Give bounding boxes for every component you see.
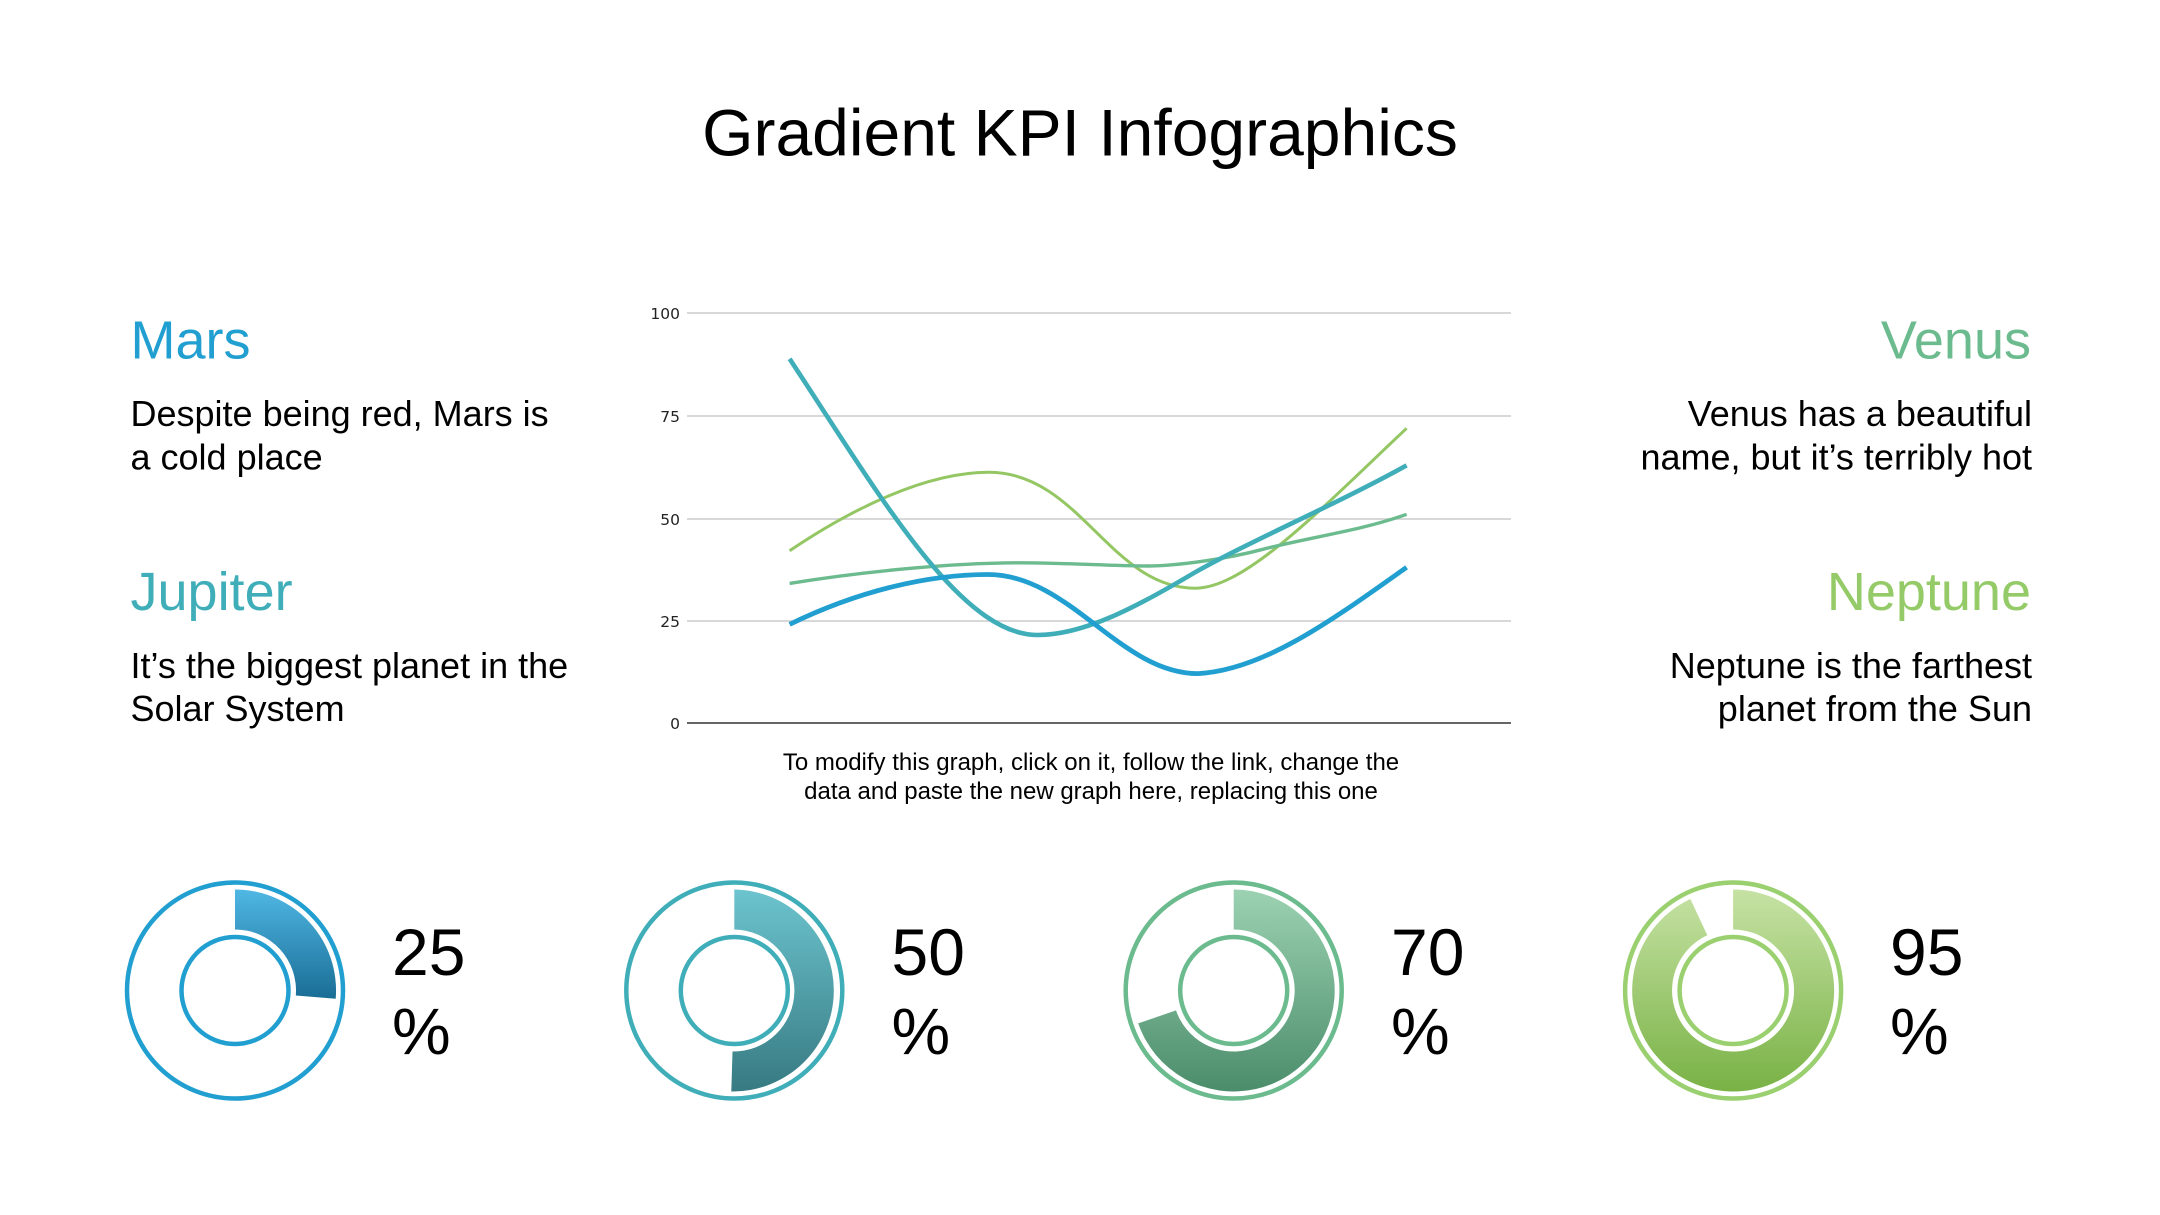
donut: 50% — [626, 882, 842, 1098]
text: Jupiter description: It’s the biggest planet in the — [130, 645, 568, 686]
text: Venus description: Venus has a beautiful — [1688, 393, 2032, 434]
heading: Jupiter: Jupiter — [130, 562, 293, 622]
text: Neptune description: planet from the Sun — [1718, 688, 2032, 729]
value: 25%: % — [392, 994, 451, 1068]
heading: Neptune: Neptune — [1827, 562, 2031, 622]
donut: 25% — [127, 882, 343, 1098]
text: Venus description: name, but it’s terribly hot — [1640, 436, 2032, 478]
axis labels: 50 — [660, 511, 680, 529]
text: Mars description: Despite being red, Mars is — [130, 393, 549, 434]
value: 50%: % — [892, 994, 950, 1068]
line: Jupiter series — [790, 359, 1407, 635]
line: Venus series — [790, 514, 1407, 583]
text: Jupiter description: Solar System — [130, 688, 345, 729]
value: 95%: % — [1890, 994, 1949, 1068]
value: 50%: 50 — [892, 915, 965, 989]
chart caption: data and paste the new graph here, replacing this one — [804, 778, 1378, 805]
line chart — [650, 305, 1511, 733]
value: 70%: 70 — [1391, 915, 1464, 989]
axis labels: 0 — [670, 715, 680, 733]
donut: 95% — [1625, 882, 1841, 1098]
axis labels: 75 — [660, 408, 680, 426]
heading: Venus: Venus — [1881, 310, 2031, 370]
line: Neptune series — [790, 428, 1407, 588]
value: 25%: 25 — [392, 915, 465, 989]
panel: Neptune — [1670, 562, 2032, 729]
heading: Mars: Mars — [130, 310, 250, 370]
text: Mars description: a cold place — [130, 436, 323, 478]
axis labels: 25 — [660, 613, 680, 631]
value: 70%: % — [1391, 994, 1450, 1068]
panel: Mars — [130, 310, 549, 478]
panel: Venus — [1640, 310, 2032, 478]
value: 95%: 95 — [1890, 915, 1963, 989]
chart caption: To modify this graph, click on it, follow the link, change the — [783, 749, 1399, 776]
panel: Jupiter — [130, 562, 568, 729]
title: Gradient KPI Infographics — [702, 96, 1458, 170]
axis labels — [650, 305, 680, 733]
line: Mars series — [790, 567, 1407, 674]
text: Neptune description: Neptune is the farthest — [1670, 645, 2032, 686]
donut: 70% — [1126, 882, 1342, 1098]
axis labels: 100 — [650, 305, 680, 323]
